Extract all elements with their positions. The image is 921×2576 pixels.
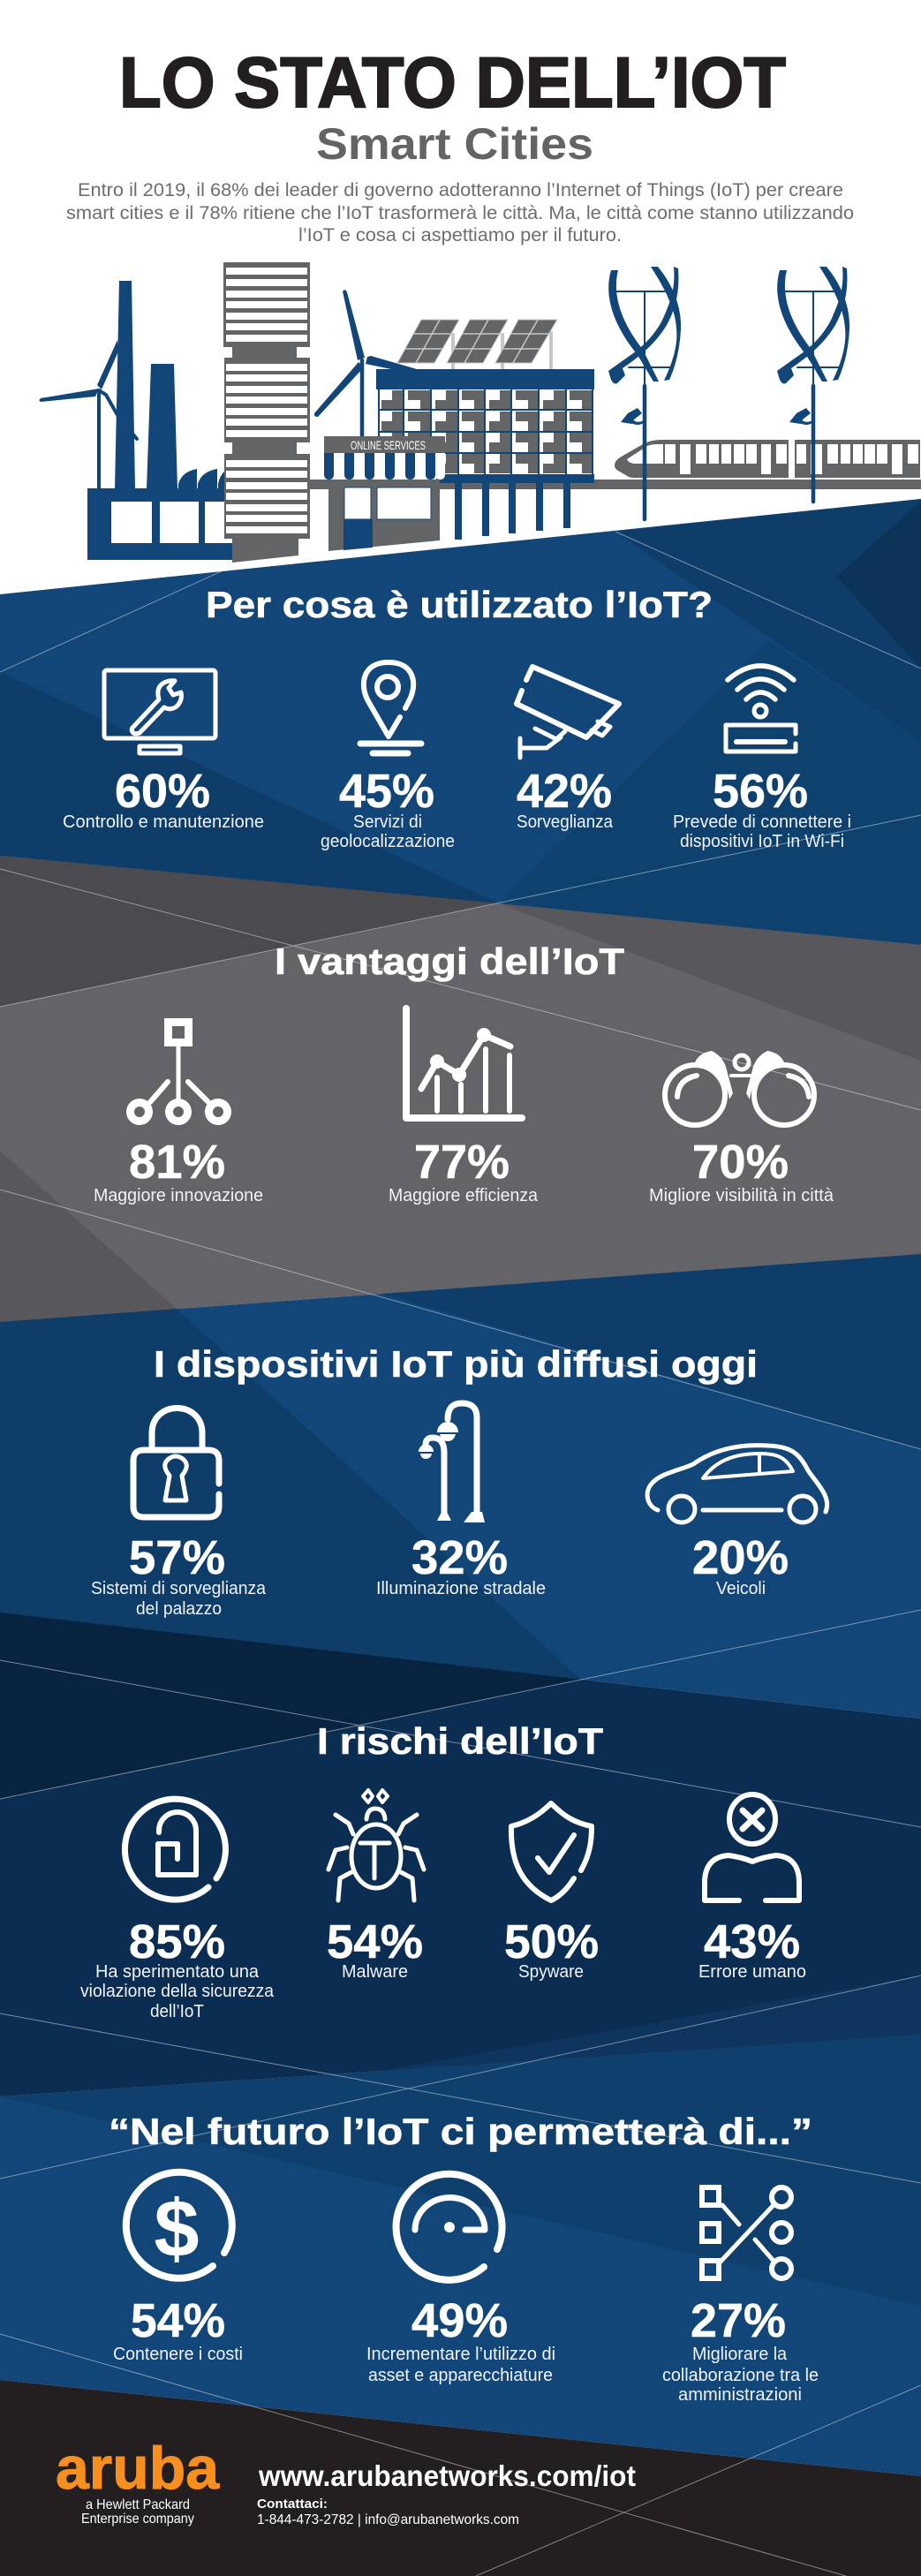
road bbox=[310, 480, 921, 489]
stat 81% bbox=[94, 1136, 263, 1205]
panel: most common IoT devices bbox=[0, 1254, 921, 1719]
heading: I dispositivi IoT più diffusi oggi bbox=[154, 1343, 758, 1385]
icon: wifi router bbox=[726, 666, 796, 752]
icon: bug bbox=[328, 1790, 424, 1900]
vertical axis wind turbine with camera, right bbox=[777, 267, 849, 502]
stat 85%: Ha sperimentato una bbox=[95, 1962, 260, 1982]
stat 85%: violazione della sicurezza bbox=[80, 1982, 275, 2001]
stat 57% bbox=[91, 1531, 267, 1619]
icon: binoculars bbox=[665, 1051, 814, 1125]
stat 27% bbox=[662, 2294, 819, 2405]
icon: monitor with wrench bbox=[104, 670, 215, 753]
panel: footer bbox=[0, 2380, 921, 2576]
stat 81%: Maggiore innovazione bbox=[94, 1186, 263, 1205]
stat 54% costs: 54% bbox=[131, 2294, 225, 2347]
stat 57%: Sistemi di sorveglianza bbox=[91, 1579, 267, 1598]
stat 70%: Migliore visibilità in città bbox=[649, 1186, 834, 1205]
tower bbox=[223, 262, 310, 563]
stat 50%: Spyware bbox=[518, 1962, 584, 1982]
stat 81%: 81% bbox=[129, 1136, 225, 1189]
stat 43%: Errore umano bbox=[698, 1962, 806, 1982]
stat 50%: 50% bbox=[504, 1915, 599, 1968]
icon: padlock bbox=[133, 1408, 219, 1517]
icon: node tree bbox=[131, 1023, 228, 1122]
train bbox=[615, 440, 920, 478]
stat 56%: dispositivi IoT in Wi-Fi bbox=[680, 832, 844, 851]
vertical axis wind turbine with camera, left bbox=[608, 267, 681, 519]
shop sign text: ONLINE SERVICES bbox=[351, 438, 426, 452]
wind turbine left bbox=[39, 340, 137, 489]
shop bbox=[324, 436, 445, 551]
website url: www.arubanetworks.com/iot bbox=[258, 2459, 636, 2492]
stat 27%: 27% bbox=[691, 2294, 786, 2347]
stat 49% bbox=[366, 2294, 555, 2385]
icon: shield with check bbox=[511, 1803, 592, 1900]
stat 20%: 20% bbox=[692, 1531, 789, 1584]
stat 49%: 49% bbox=[411, 2294, 508, 2347]
icon: crossing network bbox=[702, 2187, 791, 2278]
heading: I vantaggi dell’IoT bbox=[275, 941, 624, 982]
stat 42%: Sorveglianza bbox=[517, 812, 614, 832]
stat 54% malware: 54% bbox=[327, 1915, 423, 1968]
intro text bbox=[66, 180, 854, 246]
stat 77%: 77% bbox=[414, 1136, 510, 1189]
stat 27%: collaborazione tra le bbox=[662, 2366, 819, 2385]
stat 42%: 42% bbox=[517, 765, 612, 818]
stat 56%: Prevede di connettere i bbox=[673, 812, 851, 832]
office building bbox=[376, 369, 594, 540]
stat 54% costs bbox=[113, 2294, 243, 2364]
stat 57%: del palazzo bbox=[136, 1599, 222, 1619]
city skyline illustration bbox=[39, 262, 921, 563]
stat 27%: Migliorare la bbox=[692, 2345, 788, 2364]
icon: car bbox=[647, 1446, 827, 1522]
stat 57%: 57% bbox=[129, 1531, 225, 1584]
stat 77% bbox=[389, 1136, 539, 1205]
icon: line and bar chart bbox=[406, 1008, 522, 1118]
stat 85%: dell’IoT bbox=[150, 2002, 204, 2021]
stat 49%: Incrementare l’utilizzo di bbox=[366, 2345, 555, 2364]
stat 56%: 56% bbox=[713, 765, 808, 818]
stat 20%: Veicoli bbox=[716, 1579, 766, 1598]
stat 45% bbox=[321, 765, 455, 851]
contact details: Contattaci: bbox=[257, 2497, 328, 2512]
icon: street lamps bbox=[419, 1403, 485, 1522]
panel: IoT risks bbox=[0, 1613, 921, 2096]
intro text: smart cities e il 78% ritiene che l’IoT trasformerà le città. Ma, le città come stanno utilizzando bbox=[66, 203, 854, 223]
logo: aruba: Enterprise company bbox=[81, 2512, 194, 2527]
stat 60%: Controllo e manutenzione bbox=[63, 812, 264, 832]
icon: person with x bbox=[705, 1794, 799, 1900]
stat 45%: geolocalizzazione bbox=[321, 832, 455, 851]
logo: aruba: aruba bbox=[56, 2435, 220, 2502]
icon: dollar coin bbox=[126, 2172, 232, 2278]
intro text: l’IoT e cosa ci aspettiamo per il futuro. bbox=[298, 225, 622, 246]
stat 49%: asset e apparecchiature bbox=[368, 2366, 553, 2385]
stat 70%: 70% bbox=[692, 1136, 789, 1189]
panel: the future of IoT bbox=[0, 2035, 921, 2476]
heading: “Nel futuro l’IoT ci permetterà di...” bbox=[109, 2111, 812, 2152]
stat 85%: 85% bbox=[129, 1915, 225, 1968]
stat 60% bbox=[63, 765, 264, 832]
intro text: Entro il 2019, il 68% dei leader di governo adotteranno l’Internet of Things (IoT) per creare bbox=[78, 180, 843, 200]
stat 60%: 60% bbox=[115, 765, 210, 818]
stat 32%: 32% bbox=[411, 1531, 508, 1584]
stat 54% costs: Contenere i costi bbox=[113, 2345, 243, 2364]
stat 45%: 45% bbox=[339, 765, 434, 818]
heading: I rischi dell’IoT bbox=[317, 1720, 603, 1762]
icon: location pin bbox=[360, 662, 421, 753]
stat 43%: 43% bbox=[704, 1915, 800, 1968]
stat 70% bbox=[649, 1136, 834, 1205]
icon: breached lock bbox=[125, 1799, 225, 1900]
contact details bbox=[257, 2497, 519, 2527]
stat 32% bbox=[376, 1531, 546, 1598]
stat 54% malware: Malware bbox=[342, 1962, 408, 1982]
contact details: 1-844-473-2782 | info@arubanetworks.com bbox=[257, 2512, 519, 2527]
panel: what IoT is used for bbox=[0, 499, 921, 945]
stat 27%: amministrazioni bbox=[678, 2385, 802, 2405]
icon: surveillance camera bbox=[517, 667, 619, 758]
heading: Per cosa è utilizzato l’IoT? bbox=[206, 584, 713, 625]
stat 45%: Servizi di bbox=[353, 812, 422, 832]
icon: dollar coin: $ bbox=[154, 2184, 200, 2274]
solar panels bbox=[397, 320, 557, 369]
subtitle: Smart Cities bbox=[316, 119, 593, 169]
stat 85% bbox=[80, 1915, 275, 2021]
title: LO STATO DELL’IOT bbox=[119, 43, 786, 123]
stat 56% bbox=[673, 765, 851, 851]
wind turbine centre bbox=[314, 290, 417, 438]
stat 32%: Illuminazione stradale bbox=[376, 1579, 546, 1598]
panel: benefits of IoT bbox=[0, 856, 921, 1322]
icon: gauge bbox=[396, 2174, 502, 2280]
stat 77%: Maggiore efficienza bbox=[389, 1186, 539, 1205]
factory with chimneys bbox=[87, 281, 234, 560]
logo: aruba: a Hewlett Packard bbox=[86, 2497, 190, 2512]
